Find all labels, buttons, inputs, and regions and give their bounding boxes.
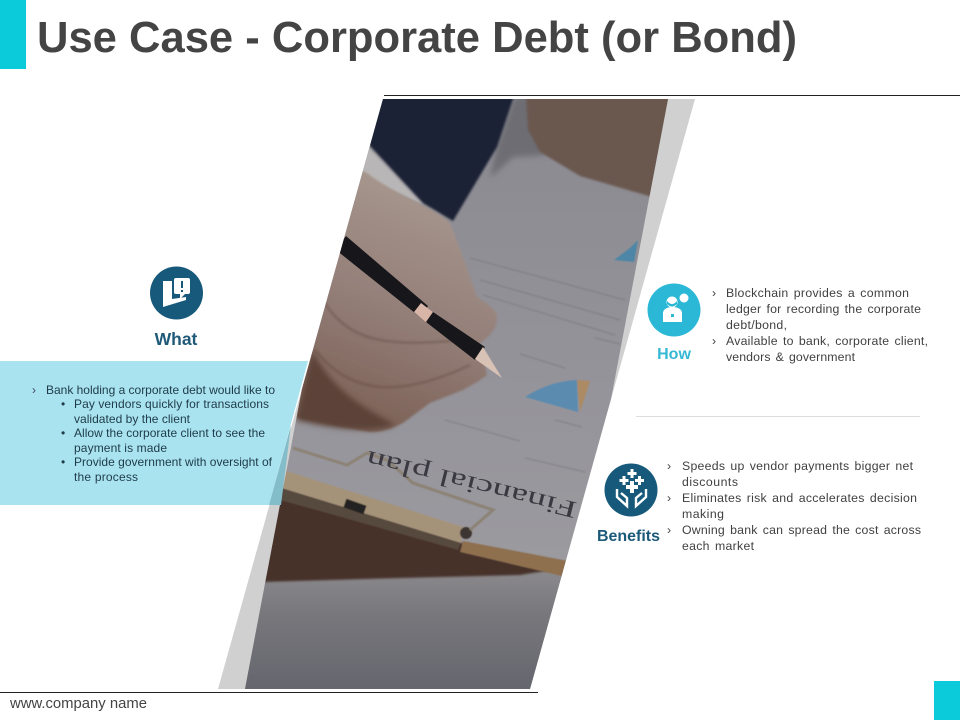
text block: What: Allow the corporate client to see the xyxy=(74,426,265,440)
text block: How: Blockchain provides a common xyxy=(726,286,909,300)
text block: What: payment is made xyxy=(74,441,167,455)
text block: Benefits: Eliminates risk and accelerates decision xyxy=(682,491,917,505)
photo: forearm top right xyxy=(526,96,672,197)
text block: Benefits: › xyxy=(667,523,671,537)
text block: What: Pay vendors quickly for transactions xyxy=(74,397,269,411)
photo: pie chart xyxy=(525,380,590,412)
text block: How: › xyxy=(712,334,716,348)
text block: How: Available to bank, corporate client, xyxy=(726,334,928,348)
text block: Benefits: discounts xyxy=(682,475,738,489)
text block: What: • xyxy=(61,455,65,469)
photo: navy sleeve xyxy=(360,96,514,221)
text block: What: › xyxy=(32,383,36,397)
text block: How xyxy=(712,286,928,364)
text block: Benefits: › xyxy=(667,459,671,473)
text block: What xyxy=(32,383,275,484)
text block: What: validated by the client xyxy=(74,412,191,426)
photo: pen xyxy=(336,236,502,378)
gray backing parallelogram xyxy=(218,99,695,689)
photo: metal clip xyxy=(270,448,493,550)
text block: What: • xyxy=(61,397,65,411)
photo: table xyxy=(245,572,563,689)
footer text: www.company name xyxy=(9,695,147,712)
text block: Benefits: › xyxy=(667,491,671,505)
photo: upside-down heading: Financial plan xyxy=(364,445,579,522)
photo: blue chart chip xyxy=(614,240,638,262)
icon: How xyxy=(648,284,700,336)
heading: What: What xyxy=(155,329,198,349)
photo: background gap between arms xyxy=(490,96,545,178)
top rule xyxy=(384,95,960,96)
divider xyxy=(636,416,920,417)
bottom rule xyxy=(0,692,538,693)
text block: Benefits: Owning bank can spread the cost across xyxy=(682,523,921,537)
photo: white cuff xyxy=(363,147,422,204)
photo: document text lines xyxy=(445,258,625,472)
photo: hand xyxy=(290,165,497,432)
text block: What: Provide government with oversight of xyxy=(74,455,273,469)
accent block: top left xyxy=(0,0,26,69)
text block: Benefits xyxy=(667,459,921,553)
photo: wooden clipboard xyxy=(262,496,563,582)
text block: Benefits: making xyxy=(682,507,724,521)
photo: hand signing a financial plan xyxy=(245,99,668,689)
photo: finger creases xyxy=(315,302,470,388)
text block: How: ledger for recording the corporate xyxy=(726,302,921,316)
photo: clipboard edge xyxy=(460,541,568,576)
text block: What: • xyxy=(61,426,65,440)
icon: Benefits xyxy=(604,464,658,516)
photo: dark knuckle area xyxy=(296,350,395,429)
text block: Benefits: Speeds up vendor payments bigger net xyxy=(682,459,914,473)
text block: How: debt/bond, xyxy=(726,318,787,332)
text block: How: vendors & government xyxy=(726,350,856,364)
text block: What: Bank holding a corporate debt would like to xyxy=(46,383,275,397)
text block: What: the process xyxy=(74,470,138,484)
text block: Benefits: each market xyxy=(682,539,755,553)
accent block: bottom right xyxy=(934,681,960,720)
text block: How: › xyxy=(712,286,716,300)
icon: What xyxy=(150,266,203,320)
cyan band: What panel xyxy=(0,361,308,505)
photo background paper xyxy=(245,99,668,689)
heading: How: How xyxy=(657,346,691,363)
heading: Benefits: Benefits xyxy=(597,528,660,545)
title: Use Case - Corporate Debt (or Bond) xyxy=(37,13,797,62)
